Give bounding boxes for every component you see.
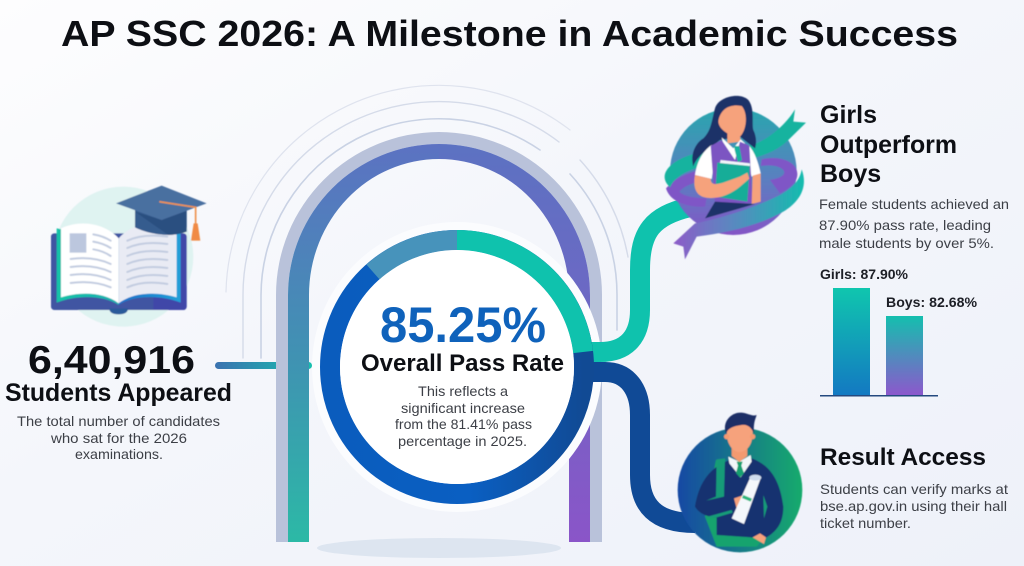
bar: girls — [833, 288, 870, 395]
description: girls: male students by over 5%. — [819, 235, 994, 251]
progress ring — [330, 240, 584, 494]
heading: girls outperform boys — [820, 101, 957, 188]
description: result access: ticket number. — [820, 515, 911, 531]
description: candidates — [17, 413, 220, 462]
heading: result access: Result Access — [820, 444, 986, 471]
thin concentric arcs — [226, 85, 628, 358]
icon: boy student with scroll — [678, 413, 802, 552]
ground shadow — [317, 538, 561, 558]
description: pass rate — [395, 383, 532, 449]
description: candidates: examinations. — [75, 446, 163, 462]
description: pass rate: from the 81.41% pass — [395, 416, 532, 432]
description: girls: Female students achieved an — [819, 196, 1009, 212]
title: AP SSC 2026: A Milestone in Academic Success — [61, 13, 958, 54]
number: 85.25%: 85.25% — [380, 297, 546, 353]
heading: girls outperform boys: Girls — [820, 101, 877, 129]
connector line — [215, 362, 312, 369]
inner white disc — [340, 250, 574, 484]
heading: girls outperform boys: Outperform — [820, 131, 957, 159]
bar: boys — [886, 316, 923, 395]
description: girls: 87.90% pass rate, leading — [819, 217, 991, 233]
bar chart: girls vs boys — [820, 266, 978, 396]
panel: girls outperform boys — [665, 96, 1009, 396]
panel: central arch and pass rate — [226, 85, 695, 558]
dark blue connector to result access — [575, 372, 695, 523]
panel: students appeared — [5, 186, 312, 462]
description: result access — [820, 481, 1008, 531]
description: candidates: The total number of candidates — [17, 413, 220, 429]
heading: girls outperform boys: Boys — [820, 160, 881, 188]
label: boys value: Boys: 82.68% — [886, 294, 978, 310]
description: pass rate: percentage in 2025. — [398, 433, 527, 449]
inner arch band — [288, 144, 590, 542]
icon: open book with graduation cap — [51, 186, 207, 327]
axis — [820, 395, 938, 396]
description: pass rate: This reflects a — [418, 383, 508, 399]
teal connector to girls — [575, 207, 690, 352]
label: girls value: Girls: 87.90% — [820, 266, 909, 282]
description: result access: bse.ap.gov.in using their hall — [820, 498, 1007, 514]
white halo — [312, 222, 602, 512]
description: pass rate: significant increase — [401, 400, 525, 416]
outer arch band — [276, 132, 602, 542]
description: result access: Students can verify marks at — [820, 481, 1008, 497]
description: candidates: who sat for the 2026 — [50, 430, 187, 446]
label: overall pass rate: Overall Pass Rate — [361, 350, 564, 377]
panel: result access — [678, 413, 1008, 552]
description: girls — [819, 196, 1009, 251]
icon: girl student with ribbon — [665, 96, 806, 259]
number: 6,40,916: 6,40,916 — [28, 339, 195, 382]
label: students appeared: Students Appeared — [5, 379, 232, 407]
